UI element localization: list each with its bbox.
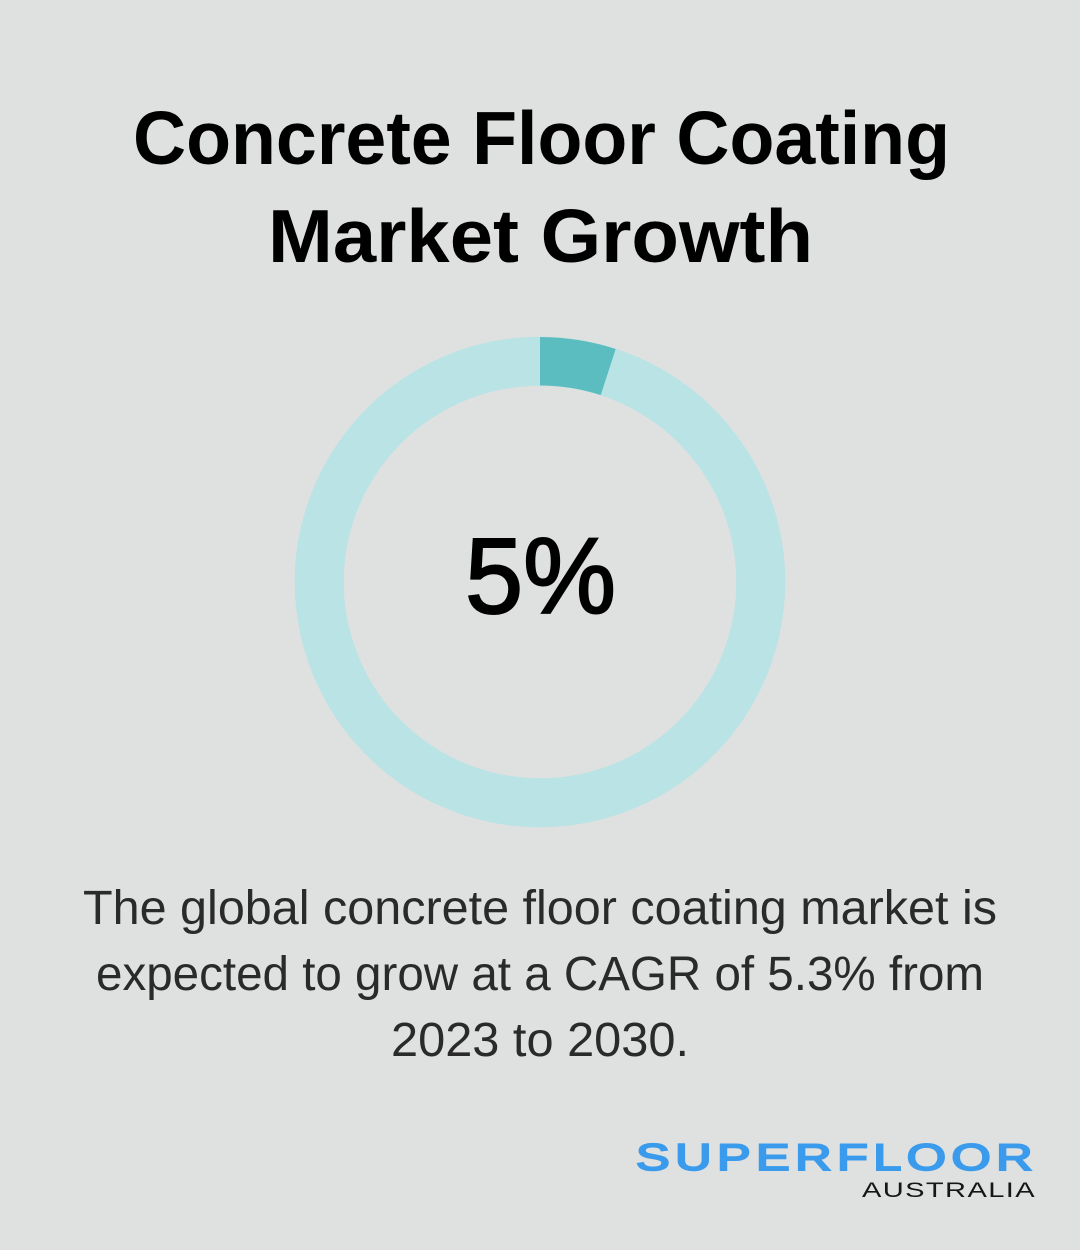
title — [133, 96, 950, 278]
title: Concrete Floor Coating — [133, 96, 950, 180]
donut chart: 5% — [319, 337, 761, 803]
value: 5%: 5% — [465, 515, 616, 636]
description text: 2023 to 2030. — [391, 1014, 689, 1067]
description text: The global concrete floor coating market is — [83, 882, 997, 935]
title: Market Growth — [268, 194, 813, 278]
logo: Superfloor Australia: SUPERFLOOR — [636, 1137, 1038, 1178]
description text — [83, 882, 997, 1067]
logo: Superfloor Australia — [636, 1137, 1038, 1202]
logo: Superfloor Australia: AUSTRALIA — [862, 1179, 1036, 1202]
description text: expected to grow at a CAGR of 5.3% from — [96, 948, 984, 1001]
